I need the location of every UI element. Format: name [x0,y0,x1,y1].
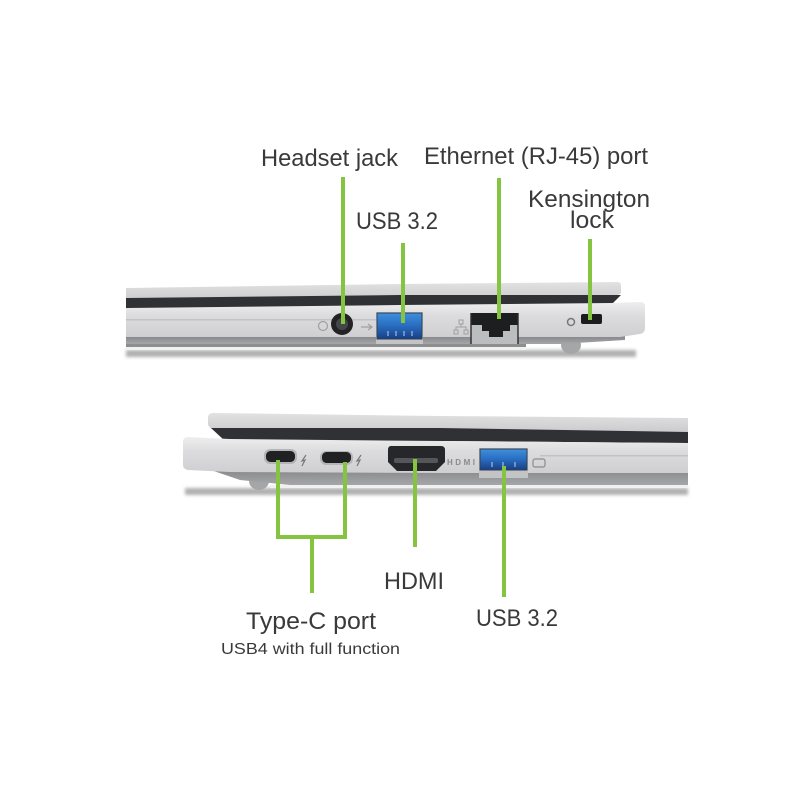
laptop lid [126,282,621,302]
lower band [205,468,688,485]
icon: usb symbol [361,324,372,330]
callout line: usb 3.2 top [401,243,405,323]
hinge gap [211,428,688,443]
laptop shadow [185,488,688,495]
label: headset jack: Headset jack [261,145,399,172]
rubber foot [561,336,581,354]
label: ethernet port: Ethernet (RJ-45) port [424,143,648,170]
usb 3.2 port bottom [479,448,528,478]
rubber foot [249,472,269,490]
usb 3.2 port top [376,312,423,344]
panel: bottom laptop side view [183,413,688,495]
sublabel: usb4 with full function: USB4 with full function [221,641,400,658]
callout line: ethernet [497,178,501,319]
callout line: hdmi [413,459,417,547]
hdmi port [388,446,445,471]
label: kensington lock [528,186,650,234]
label: type-c port: Type-C port [246,608,376,635]
laptop base [183,437,688,473]
icon: thunderbolt 2 [357,455,361,466]
lower band [126,336,625,344]
label: usb 3.2 top: USB 3.2 [356,208,438,235]
kensington lock slot [581,314,602,324]
icon: network symbol [454,320,468,334]
callout bracket: type-c ports [278,460,345,593]
callout line: headset jack [341,177,345,324]
type-c port 2 [320,451,353,465]
laptop shadow [126,350,636,357]
icon: lock symbol [568,318,574,326]
panel: top laptop side view [126,282,645,357]
hdmi label: HDMI [447,458,475,467]
callout line: usb 3.2 bottom [502,466,506,597]
label: kensington lock: lock [570,207,615,234]
type-c port 1 [264,449,297,464]
label: usb 3.2 bottom: USB 3.2 [476,605,558,632]
headset jack socket [331,313,353,335]
icon: headset symbol [318,322,328,330]
label: kensington lock: Kensington [528,186,650,213]
icon: thunderbolt 1 [302,455,306,466]
ethernet port [471,313,518,344]
callout line: kensington lock [588,239,592,320]
label: hdmi: HDMI [384,568,444,595]
hinge gap [126,295,621,309]
laptop base [126,302,645,337]
laptop lid [208,413,688,434]
icon: battery symbol [533,459,545,467]
